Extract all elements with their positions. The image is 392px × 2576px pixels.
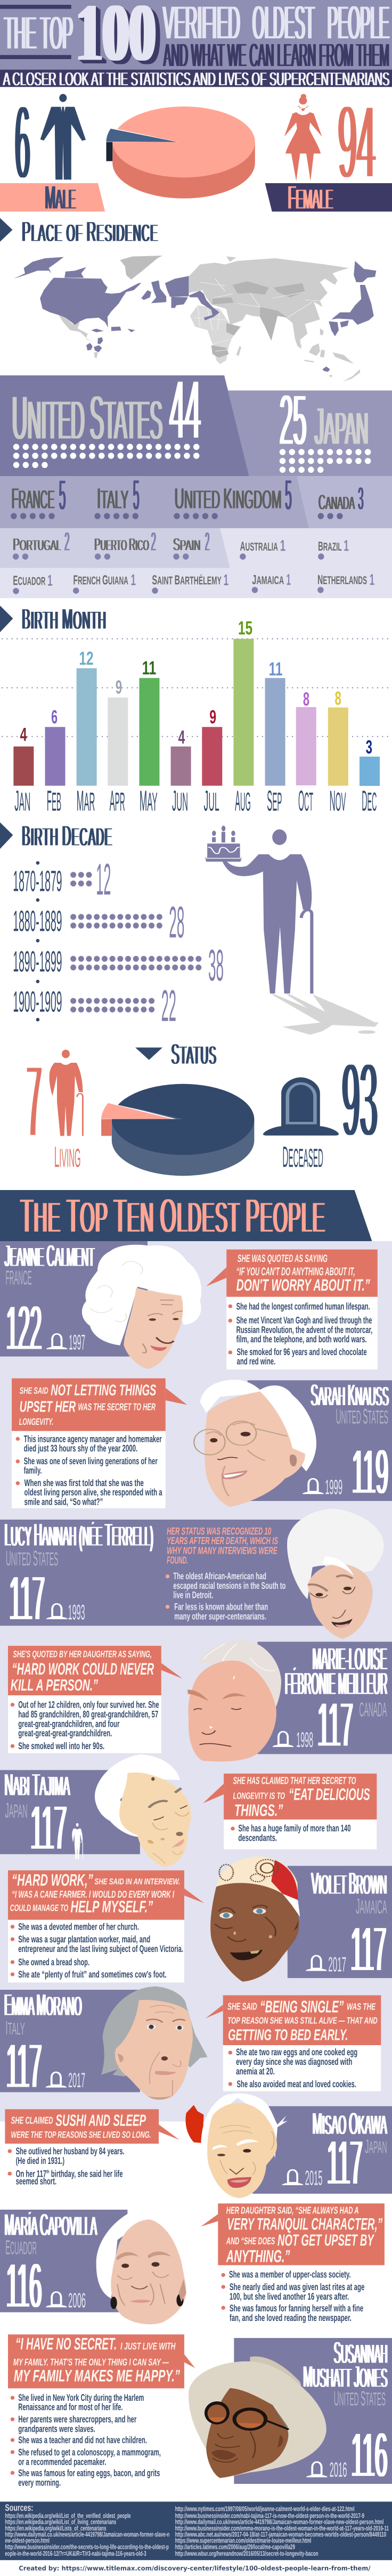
bar: september <box>265 658 285 786</box>
icon: small living person <box>72 1823 83 1859</box>
facts <box>5 2144 159 2188</box>
name panel <box>0 1238 148 1363</box>
panel: countries with 1 to 2 <box>0 527 392 598</box>
month labels: JUL <box>204 784 219 817</box>
quote <box>201 2203 385 2266</box>
name panel <box>0 1987 140 2101</box>
quote: SHE'S QUOTED BY HER DAUGHTER AS SAYING, <box>13 1649 152 1660</box>
panel: countries with 1 to 2: 2 <box>64 527 69 556</box>
name panel: 116 <box>6 2250 42 2321</box>
month labels: NOV <box>330 784 346 817</box>
decade counts <box>96 855 224 1030</box>
panel: united states count: 44 <box>169 363 201 456</box>
text: LIVING <box>54 1141 81 1173</box>
label: united kingdom: UNITED KINGDOM <box>175 482 282 515</box>
quote <box>206 1250 378 1297</box>
sources list: left: ew-oldest-person.html <box>5 2537 50 2545</box>
profile: misao okawa <box>5 2093 392 2198</box>
sources heading: Sources: <box>5 2503 33 2513</box>
icon: living elder <box>50 1049 83 1136</box>
facts: The oldest African-American had <box>173 1571 266 1581</box>
facts: She lived in New York City during the Harlem <box>18 2392 144 2403</box>
profile: sarah knauss: oldest living person alive, she responded with a <box>24 1487 162 1498</box>
facts: She smoked well into her 90s. <box>18 1741 104 1751</box>
facts: She was a devoted member of her church. <box>18 1921 139 1932</box>
icon: man in suit <box>40 94 86 179</box>
panel: living count: 7 <box>27 1044 42 1159</box>
panel: countries with 1 to 2: PORTUGAL <box>13 535 61 554</box>
name panel: 117 <box>9 1563 45 1634</box>
facts: died just 33 hours shy of the year 2000. <box>24 1443 137 1454</box>
quote: “I HAVE NO SECRET. <box>15 2334 117 2353</box>
pie chart: status <box>101 1084 254 1176</box>
name panel: MARÍA CAPOVILLA <box>4 2207 97 2242</box>
bar: january <box>13 724 34 786</box>
quote: “HARD WORK COULD NEVER <box>12 1660 154 1678</box>
bar: february <box>45 706 66 786</box>
panel: countries with 3 to 5: 5 <box>285 471 292 519</box>
portrait: emma morano <box>101 1987 208 2100</box>
name panel <box>0 1767 140 1863</box>
facts <box>218 2265 385 2328</box>
name panel: NABI TAJIMA <box>4 1767 70 1803</box>
month labels: OCT <box>298 784 313 817</box>
bar: august: 15 <box>238 617 252 638</box>
sources list: left: https://en.wikipedia.org/wiki/Lists_of_centenarians <box>5 2524 106 2532</box>
facts <box>8 1695 161 1753</box>
panel: countries with 3 to 5: ITALY <box>97 482 128 515</box>
facts: When she was first told that she was the <box>24 1478 144 1488</box>
facts: family. <box>24 1465 42 1476</box>
profile: emma morano <box>0 1987 381 2101</box>
profile: violet brown: entrepreneur and the last living subject of Queen Victoria. <box>18 1943 183 1954</box>
facts: many other super-centenarians. <box>174 1611 266 1621</box>
icon: elder with cake and cane <box>205 826 375 1022</box>
profile: sarah knauss: She was one of seven living generations of her <box>24 1456 158 1466</box>
quote: NOT LETTING THINGS <box>51 1382 156 1399</box>
quote: WAS THE SECRET TO HER <box>78 1401 156 1412</box>
panel: countries with 1 to 2: JAMAICA <box>252 572 284 587</box>
footer: sources: http://www.businessinsider.com/the-secrets-to-long-life-according-to-the-oldest-p <box>5 2544 169 2551</box>
quote <box>8 2334 195 2389</box>
quote: MY FAMILY. THAT'S THE ONLY THING I CAN SAY — <box>13 2357 169 2367</box>
panel: japan count <box>228 380 392 476</box>
bar: november <box>328 687 348 786</box>
quote <box>167 1525 278 1566</box>
name panel <box>0 2207 127 2321</box>
bar: september: 11 <box>269 658 282 679</box>
facts: grandparents were slaves. <box>18 2423 95 2434</box>
portrait: susannah mushatt jones <box>189 2357 326 2478</box>
facts: Far less is known about her than <box>174 1601 268 1612</box>
quote: FOUND. <box>167 1555 188 1566</box>
tally dots: residence counts <box>14 447 368 591</box>
facts: anemia at 20. <box>236 2066 275 2077</box>
quote: “I WAS A CANE FARMER. I WOULD DO EVERY WORK I <box>12 1889 174 1900</box>
portrait: jeanne calment <box>82 1245 201 1369</box>
sources list: left <box>5 2512 169 2557</box>
name panel: 2015 <box>305 2166 323 2189</box>
sources list: left: eople-in-the-world-2016-12/?r=UK&IR=T/#3-nabi-tajima-116-years-old-3 <box>5 2550 146 2557</box>
month labels: APR <box>110 784 125 817</box>
quote <box>203 1774 377 1819</box>
bar: october: 8 <box>303 688 309 710</box>
sources list: left: https://en.wikipedia.org/wiki/List_of_living_centenarians <box>5 2518 116 2526</box>
profile: sarah knauss <box>12 1378 392 1508</box>
panel: countries with 1 to 2: 1 <box>344 537 349 554</box>
profile: jeanne calment <box>0 1238 378 1369</box>
label: spain: SPAIN <box>173 535 200 554</box>
bar: january: 4 <box>20 724 27 745</box>
name panel: JAPAN <box>5 1799 28 1822</box>
quote: HELP MYSELF.” <box>70 1897 153 1916</box>
panel: living count <box>27 1044 83 1173</box>
facts: live in Detroit. <box>173 1590 213 1601</box>
name panel: 1999 <box>325 1475 342 1498</box>
bar: october <box>296 688 316 785</box>
panel: countries with 1 to 2: 1 <box>280 537 285 554</box>
name panel <box>0 1516 325 1634</box>
name panel <box>234 2335 392 2484</box>
quote: THINGS.” <box>234 1801 283 1819</box>
profile: nabi tajima <box>0 1754 377 1867</box>
profile: sarah knauss: This insurance agency manager and homemaker <box>24 1433 162 1444</box>
portrait: maria capovilla <box>96 2205 204 2324</box>
name panel <box>288 1865 392 1984</box>
panel: countries with 1 to 2: 2 <box>205 527 209 556</box>
month labels: AUG <box>235 784 251 817</box>
bar: december: 3 <box>366 736 372 758</box>
footer: sources <box>0 2501 392 2576</box>
decade labels <box>13 861 62 1021</box>
name panel: 122 <box>6 1292 42 1363</box>
footer: sources: http://www.dailymail.co.uk/news/article-4419798/Jamaican-woman-former-slave-n <box>5 2531 169 2538</box>
facts: She was a teacher and did not have children. <box>18 2435 147 2446</box>
quote: “HARD WORK,” <box>12 1871 93 1889</box>
bar: april: 9 <box>116 676 122 698</box>
quote: ANYTHING.” <box>226 2246 290 2266</box>
profile: marie-louise meilleur <box>8 1640 392 1761</box>
quote: COULD MANAGE TO <box>10 1903 68 1913</box>
facts: great-great-grandchildren, and four <box>18 1718 119 1729</box>
month labels <box>14 784 377 817</box>
panel: united states count: UNITED STATES <box>12 382 162 453</box>
text: 1900-1909 <box>13 985 62 1018</box>
facts: th <box>46 2169 50 2175</box>
name panel <box>248 1378 392 1507</box>
quote: AND “SHE DOES <box>226 2235 275 2246</box>
panel: male count: MALE <box>45 179 76 216</box>
text: 1890-1899 <box>13 945 62 978</box>
panel: countries with 1 to 2: 1 <box>286 571 291 588</box>
name panel: 117 <box>30 1792 67 1863</box>
name panel: ECUADOR <box>5 2236 37 2258</box>
name panel: FRANCE <box>5 1267 32 1289</box>
quote <box>206 1995 381 2045</box>
facts <box>166 1571 286 1621</box>
portrait: marie-louise meilleur <box>187 1640 281 1761</box>
quote: UPSET HER <box>20 1398 76 1415</box>
icon: shadow of elder <box>282 1022 379 1035</box>
bar: july <box>202 706 222 786</box>
bar: june: 4 <box>178 726 185 748</box>
facts: She was famous for eating eggs, bacon, and grits <box>18 2468 160 2479</box>
heading: place of residence: PLACE OF RESIDENCE <box>22 215 158 248</box>
panel: countries with 3 to 5: 5 <box>133 471 139 519</box>
month labels: JUN <box>172 784 188 817</box>
quote: WERE THE TOP REASONS SHE LIVED SO LONG. <box>11 2130 151 2140</box>
bar: february: 6 <box>51 706 58 727</box>
panel: countries with 1 to 2: BRAZIL <box>318 539 342 553</box>
heading: birth decade <box>0 819 112 852</box>
quote <box>8 1646 183 1695</box>
facts <box>224 1819 377 1849</box>
name panel: ITALY <box>5 2017 25 2039</box>
panel: countries with 1 to 2: 1 <box>47 571 53 589</box>
month labels: MAY <box>140 784 158 817</box>
name panel: 1997 <box>69 1330 85 1354</box>
header: title block <box>0 0 392 89</box>
profile: marie-louise meilleur: Out of her 12 children, only four survived her. She <box>18 1700 159 1710</box>
bar: july: 9 <box>209 706 216 727</box>
quote <box>12 1379 187 1431</box>
bar: december <box>360 736 380 786</box>
decade counts: 28 <box>169 897 184 947</box>
quote: SHE CLAIMED <box>11 2114 53 2126</box>
facts: On her 117 <box>16 2168 85 2179</box>
panel: countries with 3 to 5: 5 <box>59 472 66 519</box>
panel: countries with 3 to 5: 3 <box>358 481 363 516</box>
bar: june <box>171 726 191 786</box>
name panel: 2006 <box>68 2288 86 2312</box>
quote: KILL A PERSON.” <box>11 1676 98 1694</box>
profile: maria capovilla <box>0 2203 385 2328</box>
portrait: lucy hannah <box>287 1508 384 1639</box>
facts: descendants. <box>238 1832 277 1843</box>
facts <box>12 1431 166 1508</box>
quote: SHE SAID <box>20 1385 48 1396</box>
bar: march <box>77 647 97 786</box>
panel: countries with 1 to 2: 1 <box>224 571 228 588</box>
bar: april <box>108 676 128 786</box>
profile: marie-louise meilleur: had 85 grandchildren, 80 great-grandchildren, 57 <box>18 1709 158 1720</box>
text: STATUS <box>172 1038 217 1070</box>
panel: male count: 6 <box>15 84 30 201</box>
portrait: misao okawa <box>185 2093 288 2198</box>
facts: (He died in 1931.) <box>16 2155 64 2166</box>
quote <box>8 1871 204 1920</box>
portrait: sarah knauss <box>194 1380 316 1507</box>
name panel <box>252 2106 392 2198</box>
facts: smile and said, “So what?” <box>24 1497 103 1507</box>
profile: lucy hannah <box>0 1508 384 1639</box>
heading: birth month: BIRTH MONTH <box>22 603 107 636</box>
bar: march: 12 <box>79 647 94 669</box>
profile: susannah mushatt jones <box>8 2334 392 2491</box>
text: BIRTH DECADE <box>22 819 112 852</box>
label: puerto rico: PUERTO RICO <box>94 535 149 554</box>
decade counts: 12 <box>96 855 111 904</box>
facts: Her parents were sharecroppers, and her <box>18 2414 136 2424</box>
month labels: MAR <box>77 784 95 817</box>
name panel: 2017 <box>328 1952 346 1976</box>
panel: countries with 1 to 2: AUSTRALIA <box>240 539 278 553</box>
quote: LONGEVITY IS TO <box>233 1791 285 1801</box>
name panel <box>257 1641 392 1760</box>
sources list: left: https://en.wikipedia.org/wiki/List_of_the_verified_oldest_people <box>5 2512 130 2520</box>
panel: male count <box>0 84 105 216</box>
facts: every morning. <box>18 2477 61 2488</box>
name panel: 1998 <box>296 1728 313 1752</box>
name panel: 1993 <box>68 1601 85 1624</box>
bar: august <box>233 617 254 786</box>
bar: november: 8 <box>335 687 341 709</box>
facts <box>8 2389 184 2491</box>
heading: birth month <box>0 603 107 636</box>
world map <box>14 256 376 382</box>
bar chart: birth month <box>13 617 380 786</box>
header: title block: THE TOP <box>4 6 73 59</box>
facts <box>226 1297 378 1369</box>
name panel: 2017 <box>68 2069 85 2091</box>
panel: countries with 1 to 2: ECUADOR <box>13 573 45 588</box>
age and year <box>306 2419 388 2490</box>
heading: status <box>135 1038 217 1070</box>
bar: may: 11 <box>142 657 156 678</box>
name panel: LUCY HANNAH (NÉE TERRELL) <box>4 1516 153 1553</box>
panel: deceased count <box>263 1041 378 1173</box>
quote: I JUST LIVE WITH <box>120 2341 176 2351</box>
decade counts: 22 <box>161 981 176 1030</box>
facts: great-great-great-grandchildren. <box>18 1728 112 1738</box>
panel: countries with 3 to 5 <box>0 471 392 528</box>
label: saint barthelemy: SAINT BARTHÉLEMY <box>152 572 222 587</box>
text: 1870-1879 <box>13 865 62 897</box>
facts: birthday, she said her life <box>50 2168 123 2179</box>
facts: and red wine. <box>237 1356 275 1367</box>
icon: woman in dress <box>284 94 322 181</box>
name panel: EMMA MORANO <box>4 1987 81 2022</box>
panel: countries with 3 to 5: FRANCE <box>12 482 54 515</box>
facts: She outlived her husband by 84 years. <box>16 2146 125 2156</box>
facts: She was a sugar plantation worker, maid, and <box>18 1934 150 1945</box>
month labels: JAN <box>14 784 30 817</box>
quote: SHE SAID <box>227 2000 257 2012</box>
quote: MY FAMILY MAKES ME HAPPY.” <box>14 2366 180 2385</box>
month labels: SEP <box>267 784 282 817</box>
profile: violet brown <box>8 1857 392 1984</box>
name panel: 117 <box>6 2030 42 2101</box>
facts: She refused to get a colonoscopy, a mammogram, <box>18 2447 161 2457</box>
facts: She ate “plenty of fruit” and sometimes cow's foot. <box>18 1969 167 1980</box>
quote: SUSHI AND SLEEP <box>55 2112 146 2129</box>
facts: seemed short. <box>16 2176 56 2187</box>
name panel: JEANNE CALMENT <box>4 1238 94 1273</box>
pie chart: gender <box>106 106 255 199</box>
quote: SHE SAID IN AN INTERVIEW. <box>94 1877 180 1886</box>
month labels: FEB <box>47 784 61 817</box>
bar: may <box>139 657 159 786</box>
quote: LONGEVITY. <box>19 1416 53 1427</box>
panel: countries with 1 to 2: 1 <box>130 571 136 588</box>
title: 100 <box>76 0 160 81</box>
text: 1880-1889 <box>13 905 62 937</box>
tally dots: birth decades <box>74 875 199 1010</box>
facts <box>8 1920 184 1982</box>
panel: countries with 1 to 2: 2 <box>151 527 156 556</box>
facts: or a recommended pacemaker. <box>18 2456 106 2467</box>
panel: japan count: 25 <box>280 380 306 460</box>
panel: female count <box>265 84 392 216</box>
panel: countries with 1 to 2: 1 <box>370 571 374 588</box>
quote <box>5 2109 179 2144</box>
panel: united states count <box>0 363 249 476</box>
portrait: nabi tajima <box>95 1754 191 1867</box>
facts: Renaissance and for most of her life. <box>18 2402 123 2413</box>
heading: place of residence <box>0 215 158 248</box>
portrait: violet brown <box>210 1857 300 1982</box>
text: 38 <box>208 940 224 990</box>
label: french guiana: FRENCH GUIANA <box>74 572 128 587</box>
facts <box>223 2045 381 2091</box>
sources list: right <box>175 2505 389 2557</box>
icon: tombstone <box>263 1077 339 1136</box>
facts: She owned a bread shop. <box>18 1957 89 1967</box>
name panel: UNITED STATES <box>6 1546 58 1570</box>
